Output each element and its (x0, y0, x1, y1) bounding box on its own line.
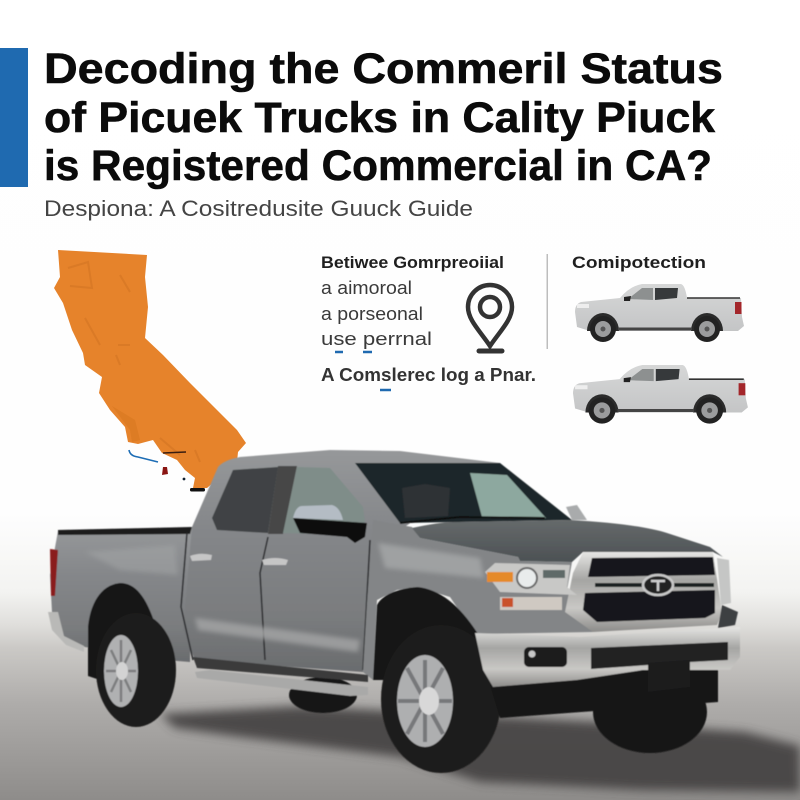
text lines: a porseonal (321, 304, 423, 324)
right headlight (717, 558, 731, 605)
grille slot (595, 583, 714, 587)
front wheel arch (373, 587, 484, 680)
emblem (643, 575, 673, 595)
windshield interior seat (402, 484, 450, 518)
grille surround (565, 552, 722, 632)
blue dashes (335, 352, 391, 390)
front bumper (475, 627, 740, 687)
fog lamp pocket (524, 647, 567, 667)
map: California (54, 250, 246, 492)
text lines: use perrnal (321, 329, 432, 349)
panel: comparison text (321, 253, 536, 390)
door body highlight (195, 618, 360, 652)
upper grille (588, 557, 715, 577)
map markers (129, 450, 205, 492)
windshield glass highlight (470, 473, 546, 518)
headlight (485, 563, 577, 595)
fender highlight (378, 543, 484, 578)
title: is Registered Commercial in CA? (44, 142, 712, 190)
icon: small truck 2 (573, 365, 748, 424)
right fender edge (718, 605, 738, 628)
rear rim (104, 635, 138, 707)
bed rail (58, 527, 192, 535)
accent bar (0, 48, 28, 187)
divider (546, 254, 548, 349)
text lines (321, 278, 432, 349)
text lines: a aimoroal (321, 278, 412, 298)
far mirror (566, 505, 587, 520)
title: of Picuek Trucks in Cality Piuck (44, 94, 715, 142)
panel heading: comparison: Comipotection (572, 253, 706, 272)
title (44, 45, 723, 190)
rocker sill (193, 657, 368, 682)
license plate (648, 660, 690, 692)
running board (195, 670, 368, 696)
cab and roof (183, 450, 500, 672)
truck bed (50, 527, 192, 662)
lower bumper intake (591, 642, 728, 669)
rear wheel arch (88, 583, 165, 690)
ground shadow under truck (160, 706, 800, 792)
subtitle: Despiona: A Cositredusite Guuck Guide (44, 196, 473, 221)
lower valance (490, 665, 718, 718)
main pickup truck (48, 450, 740, 773)
door seams (181, 533, 370, 670)
front rim (397, 655, 453, 747)
title: Decoding the Commeril Status (44, 45, 723, 93)
icon: small truck 1 (575, 284, 744, 342)
tail light (50, 549, 58, 596)
wiper blades (400, 517, 545, 523)
marker lamp (500, 597, 562, 610)
caption: A Comslerec log a Pnar. (321, 365, 536, 385)
front window (283, 467, 365, 535)
front fender (363, 520, 593, 680)
windshield (355, 463, 572, 523)
b-pillar (268, 466, 297, 534)
hood (412, 520, 723, 562)
rear bumper (48, 612, 84, 652)
side mirror (293, 505, 367, 543)
rear tire (96, 613, 176, 727)
front tire (381, 625, 501, 773)
bed highlight (85, 545, 178, 575)
rear window (212, 467, 278, 533)
icon: location pin (468, 285, 512, 351)
panel heading: Betiwee Gomrpreoiial (321, 253, 504, 272)
door handles (190, 554, 288, 565)
lower grille (583, 590, 715, 622)
far side wheels (289, 671, 707, 753)
